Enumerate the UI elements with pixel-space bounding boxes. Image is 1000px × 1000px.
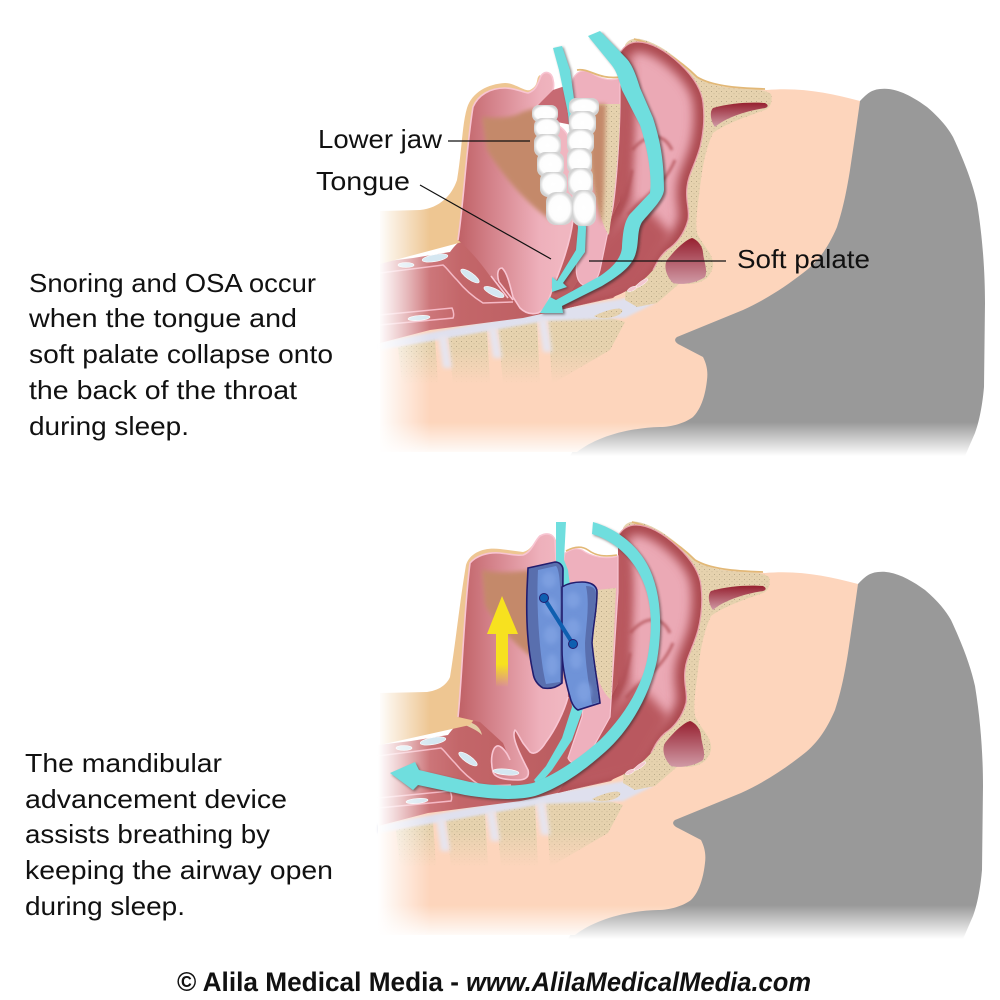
footer credit: www.AlilaMedicalMedia.com [466,967,811,997]
teeth: lower [532,105,573,225]
jaw and tongue pink outline [458,534,568,780]
airflow: mouth stream with arrow [390,522,662,800]
salivary gland [493,768,519,776]
jaw bone brown area [482,108,555,222]
edge fade [378,200,1000,456]
mandibular device: lower tray [527,562,563,688]
text block: snoring explanation: when the tongue and [28,303,297,333]
salivary gland [483,284,505,300]
lower jaw and tongue [458,73,573,314]
edge fade [378,680,1000,940]
upper lip fat edge [577,70,620,77]
mouth interior shadow [537,85,572,125]
chin and lower lip fat layer [380,75,555,264]
upper jaw brown shade [590,104,606,225]
label: Tongue: Tongue [316,166,410,196]
label: Soft palate: Soft palate [737,244,870,274]
text block: device explanation: The mandibular [25,748,222,778]
airflow: nose stream [534,522,585,786]
text block: snoring explanation: Snoring and OSA occur [29,268,316,298]
upper jaw bone [590,588,616,700]
airflow: mouth stream with arrow [540,31,666,314]
chin and lower lip fat layer [380,535,560,745]
yellow upward arrow [487,596,518,687]
upper jaw bone [590,104,620,235]
text block: snoring explanation: during sleep. [29,411,189,441]
panel: snoring and OSA anatomy [378,30,1000,456]
text block: device explanation: during sleep. [25,891,185,921]
footer credit [177,967,811,997]
upper palate and soft palate [560,549,618,764]
jaw bone brown area [482,570,566,680]
teeth: upper [567,98,599,226]
upper lip fat edge [566,547,617,556]
text block: device explanation: assists breathing by [25,819,270,849]
upper palate and soft palate [568,71,620,286]
lower jaw and tongue [458,534,568,780]
mandibular device: connecting rod [540,594,578,648]
text block: snoring explanation: soft palate collapse onto [29,339,333,369]
head base with hair, skin, bone, sinuses [380,30,985,456]
text block: snoring explanation: the back of the throat [29,375,298,405]
text block: device explanation: advancement device [25,784,287,814]
panel: mandibular advancement device anatomy [378,513,1000,940]
footer credit: © Alila Medical Media - [177,967,459,997]
text block: device explanation [25,748,333,921]
text block: snoring explanation [28,268,333,441]
text block: device explanation: keeping the airway open [25,855,333,885]
label: Lower jaw: Lower jaw [318,124,442,154]
mandibular device: upper tray [562,582,600,710]
airflow: nose stream with arrow [552,46,588,293]
leader lines [420,141,726,261]
head base with hair, skin, bone, sinuses [378,513,983,939]
jaw and tongue pink outline [458,73,573,314]
